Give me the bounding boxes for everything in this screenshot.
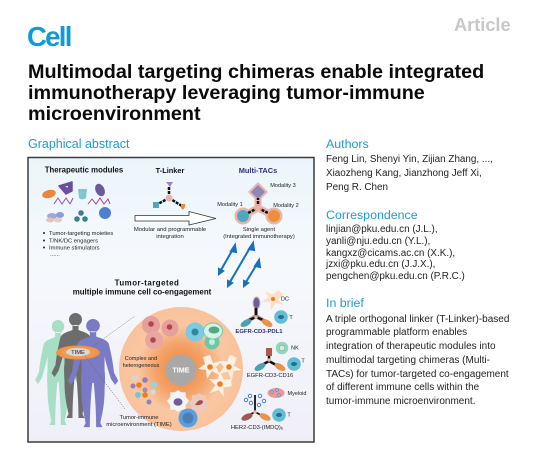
- text: in brief: TACs) for tumor-targeted co-engagement: [326, 369, 509, 380]
- dashed zoom lines: [85, 316, 135, 409]
- text: single agent: Single agent: [243, 227, 275, 233]
- cell: T (CD16): [287, 357, 305, 371]
- molecule: EGFR-CD3-CD16: [253, 348, 287, 373]
- cell: NK: NK: [291, 346, 299, 352]
- text: complex and heterogeneous: heterogeneous: [123, 363, 160, 369]
- text: modular integration: Modular and programmable: [134, 227, 206, 233]
- logo: Cell: Cell: [27, 21, 71, 52]
- cell: DC: [257, 286, 289, 312]
- text: correspondence emails: linjian@pku.edu.cn (J.L.),: [326, 224, 438, 235]
- text: correspondence emails: jzxi@pku.edu.cn (J.J.X.),: [326, 259, 435, 270]
- text: in brief: tumor-immune microenvironment.: [326, 396, 476, 407]
- list: module types: T/NK/DC engagers: [49, 238, 98, 244]
- text: in brief: of different immune cells within the: [326, 382, 479, 393]
- icon: TIME ellipse on body: [56, 346, 100, 360]
- list: module types: Tumor-targeting moieties: [49, 231, 113, 237]
- text: correspondence emails: kangxz@cicams.ac.cn (X.K.),: [326, 248, 455, 259]
- cell: Myeloid: Myeloid: [288, 391, 306, 397]
- heading: T-Linker: T-Linker: [156, 166, 184, 175]
- arrows: blue double arrows: [219, 243, 260, 286]
- title: [28, 61, 484, 125]
- heading: Multi-TACs: Multi-TACs: [239, 166, 277, 175]
- cells: dendritic: [198, 350, 246, 398]
- article label: Article: [454, 15, 511, 35]
- cells: mixed small population: [130, 375, 157, 404]
- icon: Multi-TAC molecule: [234, 182, 282, 224]
- text: in brief: programmable platform enables: [326, 327, 467, 338]
- text: authors: [326, 154, 493, 193]
- panel: abstract frame: [28, 158, 314, 442]
- label: EGFR-CD3-CD16: EGFR-CD3-CD16: [247, 373, 293, 379]
- icon: T-Linker molecule: [153, 182, 185, 210]
- cell: T (PDL1): [274, 310, 293, 324]
- text: in brief: multimodal targeting chimeras (Multi-: [326, 355, 490, 366]
- text: in brief: integration of therapeutic modules into: [326, 341, 496, 352]
- list: module types: [43, 231, 113, 258]
- text: authors: Feng Lin, Shenyi Yin, Zijian Zhang, ...,: [326, 154, 493, 165]
- label: tumor-immune microenvironment: Tumor-immune: [119, 415, 159, 421]
- cell: DC: DC: [281, 296, 289, 302]
- label: HER2-CD3-(IMDQ)6: HER2-CD3-(IMDQ)₆: [231, 425, 284, 431]
- center label: TIME: [166, 354, 196, 386]
- molecule: EGFR-CD3-PDL1: [239, 297, 274, 329]
- text: correspondence emails: yanli@nju.edu.cn (Y.L.),: [326, 236, 430, 247]
- list: module types: Immune stimulators: [49, 246, 100, 252]
- cell: T (PDL1): T: [289, 315, 293, 321]
- cell: blue lymphocyte: [178, 408, 198, 428]
- molecule: HER2-CD3-(IMDQ)6: [240, 394, 272, 422]
- center label: TIME: TIME: [172, 366, 190, 374]
- cell: T (IMDQ): [272, 408, 291, 422]
- text: modular integration: integration: [156, 234, 184, 240]
- icons: therapeutic modules: [41, 182, 111, 222]
- heading: multiple immune cell co-engagement: multiple immune cell co-engagement: [73, 288, 212, 296]
- illustration: human silhouettes: [35, 313, 118, 427]
- tumor microenvironment circle: [119, 307, 243, 431]
- text: authors: Xiaozheng Kang, Jianzhong Jeff Xi,: [326, 168, 482, 179]
- cell: Myeloid: [268, 388, 306, 398]
- text: in brief: [326, 314, 509, 407]
- labels: modalities: Modality 3: [270, 183, 296, 189]
- heading: in brief: In brief: [326, 296, 364, 310]
- text: complex and heterogeneous: Complex and: [125, 356, 157, 362]
- heading: correspondence: Correspondence: [326, 208, 418, 222]
- icon: TIME ellipse on body: TIME: [71, 350, 85, 356]
- text: correspondence emails: [326, 224, 465, 282]
- cell: T (IMDQ): T: [287, 412, 291, 418]
- list: module types: ......: [50, 252, 60, 258]
- arrow: integration: [135, 212, 216, 225]
- labels: modalities: Modality 1: [217, 202, 243, 208]
- cell: NK: [276, 342, 299, 354]
- text: in brief: A triple orthogonal linker (T-Linker)-based: [326, 314, 509, 324]
- title: microenvironment: [28, 103, 201, 125]
- heading: authors: Authors: [326, 137, 369, 151]
- label: tumor-immune microenvironment: microenvironment (TIME): [106, 422, 172, 428]
- text: correspondence emails: pengchen@pku.edu.cn (P.R.C.): [326, 271, 465, 282]
- label: EGFR-CD3-PDL1: EGFR-CD3-PDL1: [235, 329, 283, 335]
- cells: macrophage and myeloid: [167, 390, 209, 413]
- text: authors: Peng R. Chen: [326, 182, 388, 193]
- labels: modalities: Modality 2: [273, 203, 299, 209]
- cells: tumor cluster: [142, 316, 178, 349]
- cell: T (CD16): T: [301, 358, 305, 364]
- title: immunotherapy leveraging tumor-immune: [28, 82, 425, 104]
- cells: lymphocytes: [186, 322, 222, 350]
- labels: modalities: [217, 183, 299, 209]
- heading: multiple immune cell co-engagement: Tumor-targeted: [115, 278, 179, 288]
- heading: graphical abstract: Graphical abstract: [28, 136, 129, 150]
- heading: therapeutic modules: Therapeutic modules: [45, 166, 124, 174]
- text: single agent: (Integrated immunotherapy): [223, 234, 295, 240]
- title: Multimodal targeting chimeras enable integrated: [28, 61, 484, 83]
